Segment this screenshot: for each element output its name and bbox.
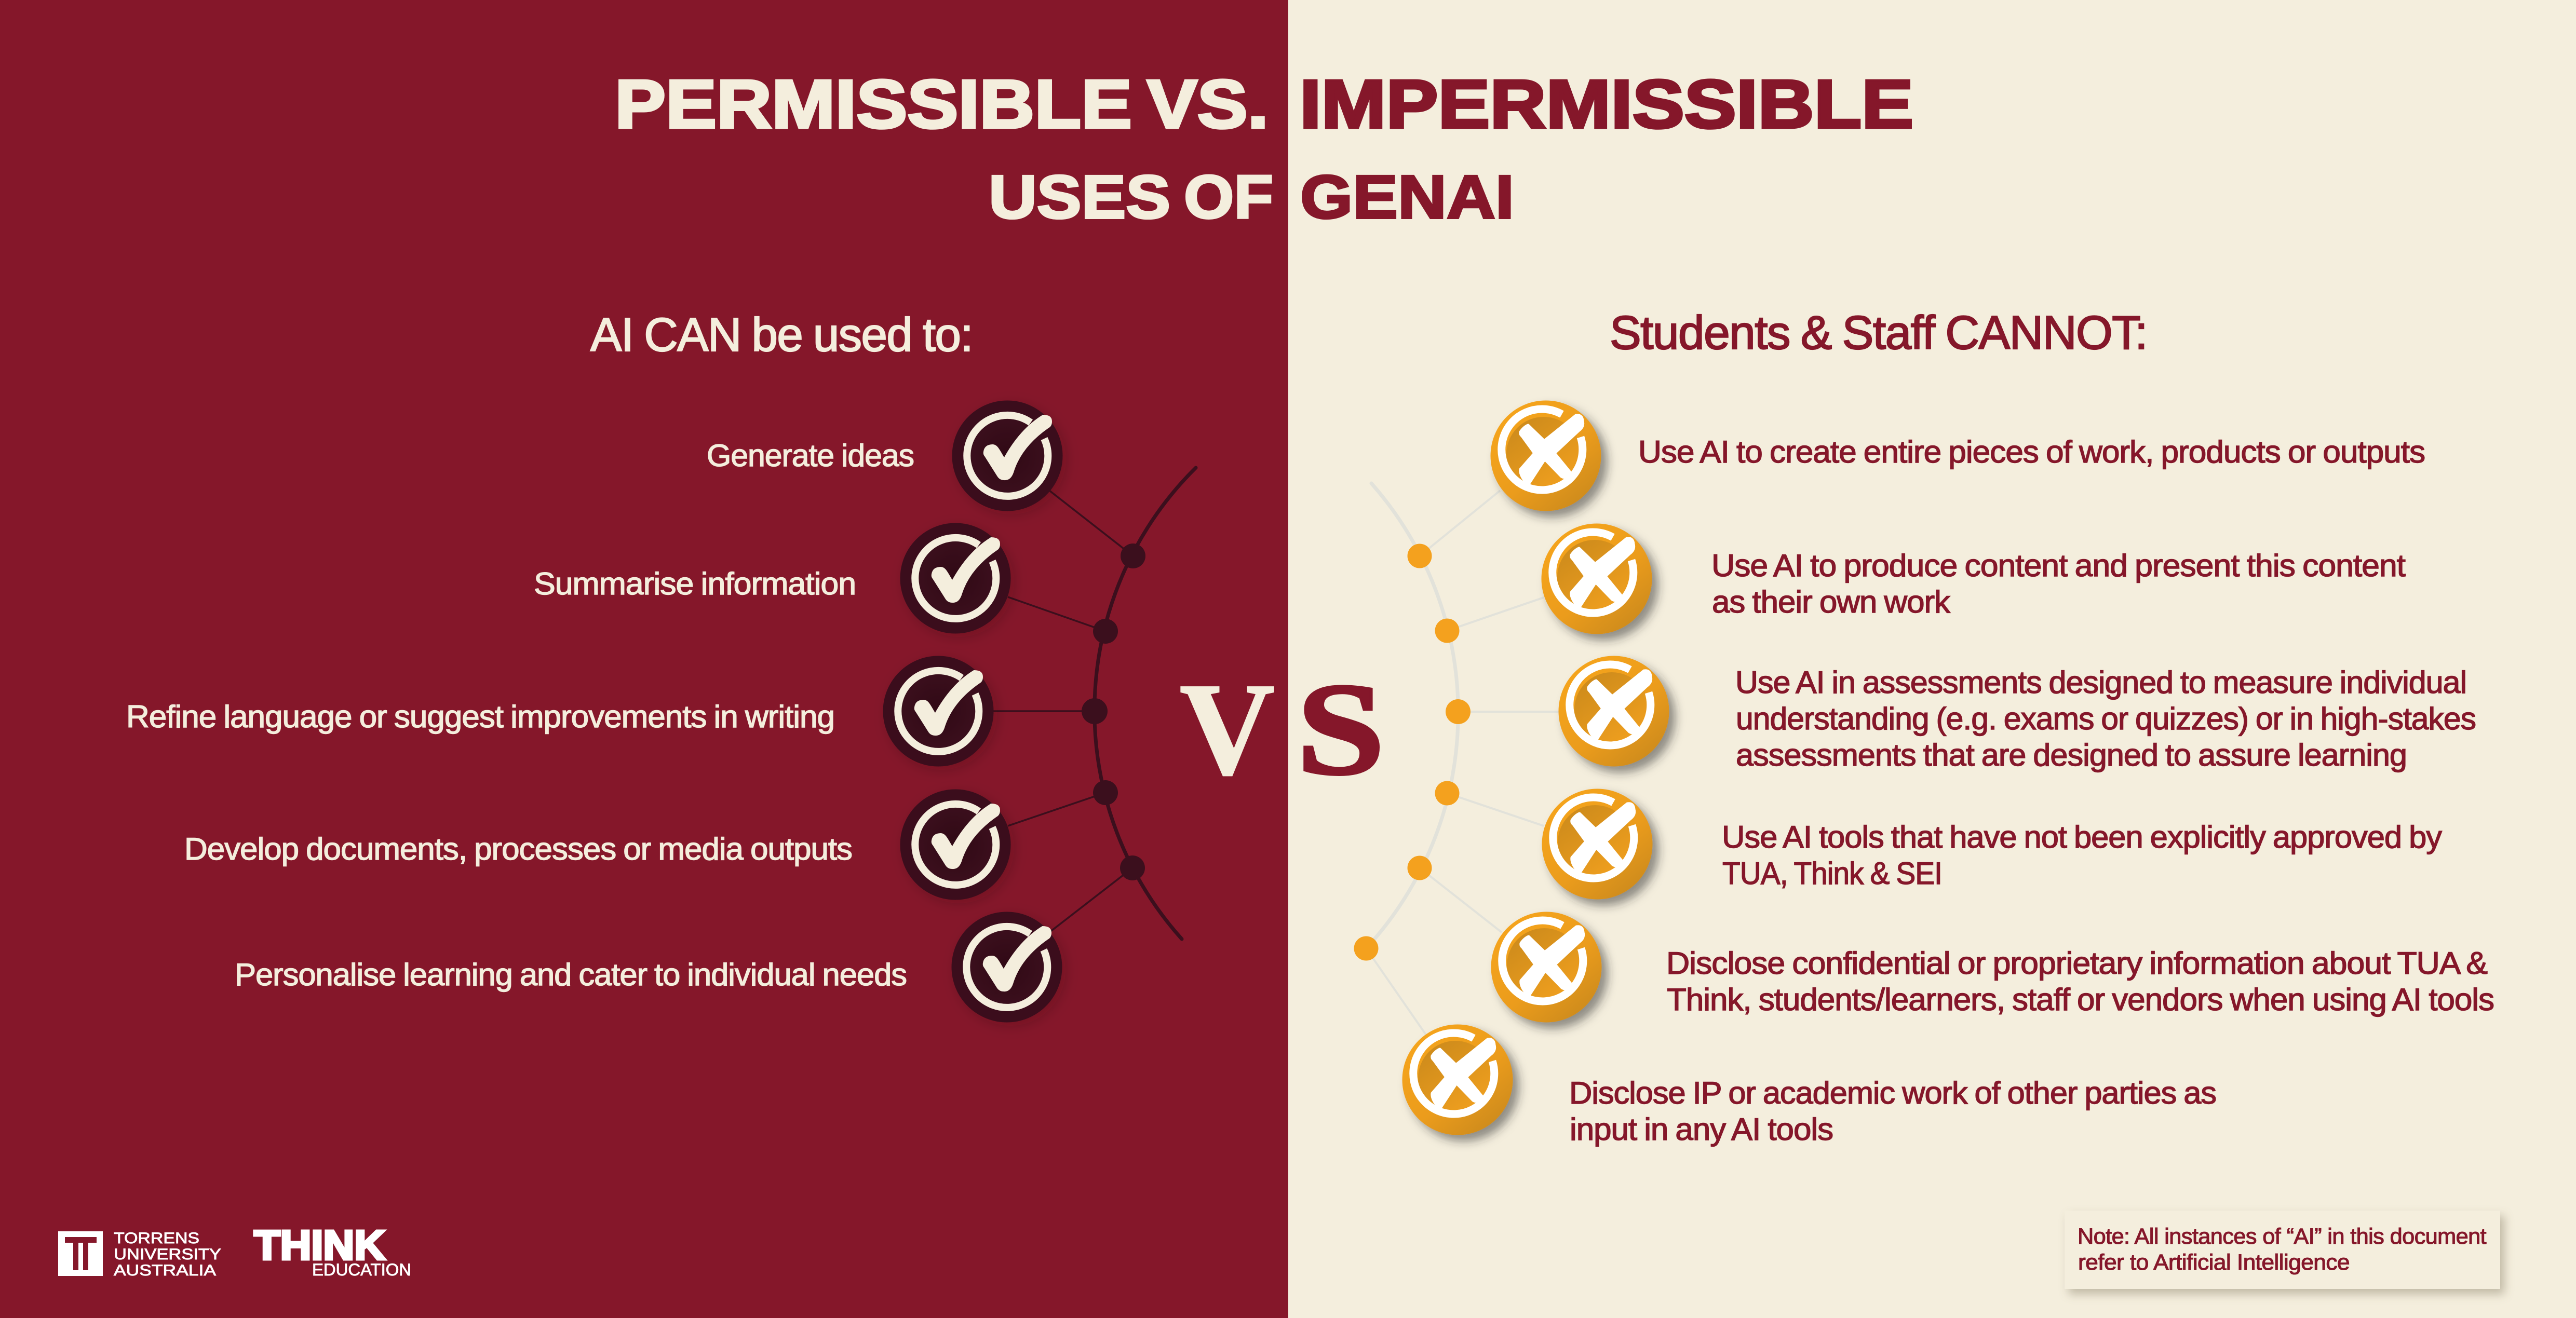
- prohibition: assessments: understanding (e.g. exams or quizzes) or in high-stakes: [1736, 701, 2476, 736]
- heading: students and staff cannot: Students & Staff CANNOT:: [1610, 307, 2147, 359]
- prohibition: assessments: assessments that are designed to assure learning: [1736, 738, 2407, 772]
- title line two: [989, 163, 1514, 232]
- prohibition: create entire work: Use AI to create entire pieces of work, products or outputs: [1638, 434, 2425, 469]
- title line one: VS.: [1147, 66, 1269, 142]
- note box: Note: All instances of “AI” in this document: [2078, 1224, 2487, 1249]
- title line two: OF: [1184, 163, 1273, 232]
- VS mark: [1180, 656, 1385, 802]
- prohibition: confidential information: Disclose confidential or proprietary information about TUA &: [1666, 946, 2488, 981]
- prohibition: assessments: Use AI in assessments designed to measure individual: [1735, 665, 2466, 700]
- title line one: [615, 66, 1913, 142]
- list item: summarise information: Summarise information: [534, 566, 856, 601]
- left connector tree: [993, 468, 1196, 939]
- title line one: PERMISSIBLE: [615, 66, 1132, 142]
- title line one: IMPERMISSIBLE: [1300, 66, 1913, 142]
- list item: develop documents: Develop documents, processes or media outputs: [184, 832, 852, 866]
- list item: generate ideas: Generate ideas: [707, 438, 914, 473]
- heading: AI can: AI CAN be used to:: [590, 309, 973, 361]
- prohibition: produce content: [1711, 548, 2406, 619]
- icon: cross 5: [1491, 912, 1601, 1023]
- icon: check 5: [951, 912, 1062, 1023]
- prohibition: unapproved tools: [1722, 820, 2442, 891]
- panel: impermissible background: [1288, 0, 2576, 1318]
- right connector tree: [1354, 483, 1559, 1035]
- logo: Torrens University Australia: AUSTRALIA: [114, 1262, 216, 1279]
- prohibition: produce content: Use AI to produce content and present this content: [1711, 548, 2406, 583]
- icon: cross 2: [1541, 523, 1652, 634]
- VS mark: S: [1297, 656, 1385, 802]
- title line two: GENAI: [1300, 163, 1514, 232]
- icon: check 3: [883, 656, 994, 766]
- prohibition: produce content: as their own work: [1712, 585, 1951, 619]
- icon: cross 4: [1542, 789, 1652, 899]
- prohibition: IP or academic work: [1569, 1076, 2216, 1147]
- prohibition: unapproved tools: TUA, Think & SEI: [1722, 856, 1942, 891]
- logo: Torrens University Australia: UNIVERSITY: [114, 1246, 221, 1263]
- VS mark: V: [1180, 656, 1275, 802]
- logo: Think Education: [254, 1222, 411, 1279]
- title line two: USES: [989, 163, 1170, 232]
- note box: [2065, 1211, 2500, 1289]
- note box: refer to Artificial Intelligence: [2078, 1250, 2350, 1275]
- icon: cross 6: [1402, 1025, 1513, 1135]
- icon: check 2: [900, 523, 1010, 633]
- icon: cross 1: [1490, 401, 1601, 511]
- prohibition: confidential information: [1666, 946, 2494, 1017]
- logo: Think Education: EDUCATION: [312, 1260, 411, 1279]
- logo: Torrens University Australia: TORRENS: [114, 1230, 199, 1247]
- list item: personalise learning: Personalise learning and cater to individual needs: [235, 957, 907, 992]
- icon: check 1: [952, 401, 1062, 511]
- icon: check 4: [900, 789, 1010, 900]
- prohibition: IP or academic work: Disclose IP or academic work of other parties as: [1569, 1076, 2216, 1110]
- panel: permissible background: [0, 0, 1288, 1318]
- prohibition: IP or academic work: input in any AI tools: [1570, 1112, 1833, 1147]
- logo: Torrens University Australia: [58, 1230, 221, 1279]
- list item: refine language: Refine language or suggest improvements in writing: [126, 699, 834, 734]
- prohibition: assessments: [1735, 665, 2476, 772]
- icon: cross 3: [1559, 656, 1669, 766]
- logo: Think Education: THINK: [254, 1222, 385, 1268]
- prohibition: unapproved tools: Use AI tools that have not been explicitly approved by: [1722, 820, 2442, 854]
- prohibition: confidential information: Think, students/learners, staff or vendors when using AI tools: [1667, 982, 2494, 1017]
